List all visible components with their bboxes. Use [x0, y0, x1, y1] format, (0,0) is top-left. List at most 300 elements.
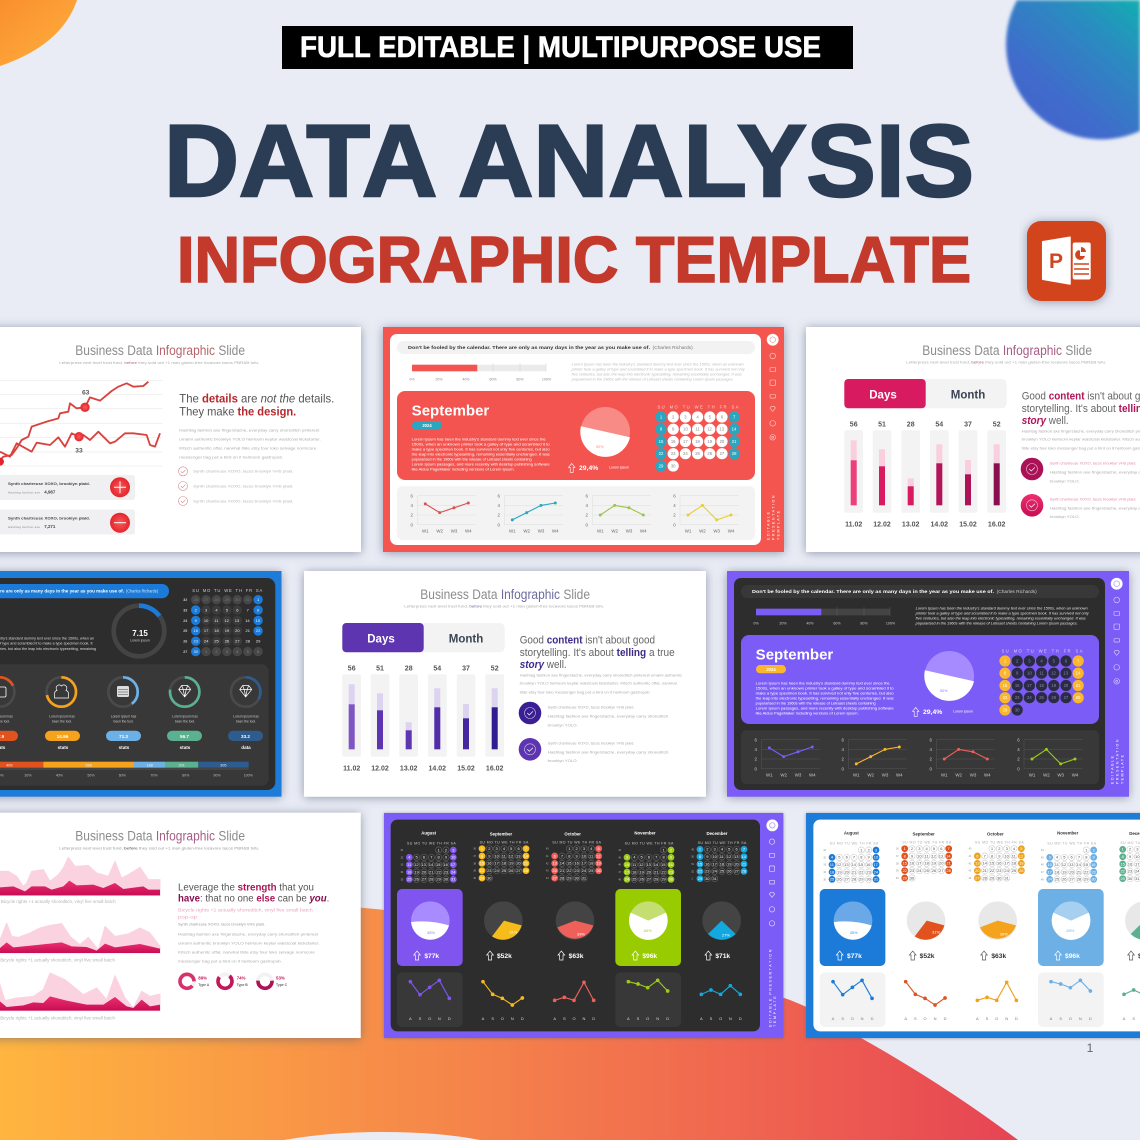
stat: growth: [568, 464, 629, 472]
calendar: November: 1 2: [663, 847, 673, 852]
chart: week yellow: 0: [842, 766, 844, 771]
calendar: November: 24 25 26 27 28 29 30: [1047, 877, 1097, 882]
calendar: September: 29 30: [480, 875, 492, 880]
mini line charts: D: [944, 1016, 947, 1021]
chart: week teal: 0: [498, 522, 500, 527]
progress bar: 0%: [753, 622, 759, 626]
mini line charts: N: [934, 1016, 937, 1021]
pie charts: 27%: [722, 933, 730, 938]
side icons: [1111, 578, 1122, 684]
vertical label: PRESENTATION: [772, 495, 776, 540]
pie charts: 31%: [509, 930, 518, 935]
calendar: December: 9: [706, 854, 708, 859]
body text: umami authentic brooklyn YOLO heirloom keytar waistcoat kickstarter.: [178, 941, 320, 945]
calendar: December: SU MO TU WE TH FR SA: [698, 841, 747, 845]
calendar: 29 30: [1003, 708, 1020, 712]
check item two: brooklyn YOLO.: [548, 759, 578, 763]
chart: week green: 2: [1017, 757, 1020, 762]
chart: week green: [586, 493, 651, 534]
calendar: August: 25 26 27 28 29 30 31: [407, 877, 456, 882]
check item one: brooklyn YOLO.: [1050, 480, 1080, 484]
mini line charts: N: [1005, 1016, 1008, 1021]
stat ring: orange: [45, 677, 80, 750]
bar chart: 51: [878, 422, 886, 429]
calendar: August: [401, 831, 456, 882]
stacked bar: 100%: [244, 774, 254, 778]
month heading: September: [412, 404, 490, 420]
banner: full editable: FULL EDITABLE | MULTIPURPOSE USE: [300, 31, 821, 64]
chart: week purple: W4: [809, 773, 816, 778]
bar chart: 12.02: [873, 521, 891, 528]
progress bar: 100%: [886, 622, 896, 626]
calendar: November: November: [1057, 831, 1079, 836]
mini line charts: D: [739, 1016, 742, 1021]
stat box: minus: [0, 510, 135, 534]
donut stats: 74%: [237, 976, 246, 981]
calendar: August: SU MO TU WE TH FR SA: [407, 841, 456, 845]
value labels: $52k: [920, 953, 935, 960]
stacked bar: 201: [179, 763, 185, 767]
chart: week yellow: 0: [673, 522, 676, 527]
calendar: August: 25 26 27 28 29 30 31: [830, 877, 879, 882]
check item two: [519, 738, 669, 763]
value labels: $63k: [991, 953, 1006, 960]
chart: week green: 6: [1017, 737, 1020, 742]
stat ring: orange: been the tool.: [52, 719, 72, 723]
progress bar: [409, 363, 552, 382]
month text: make a type specimen book. It has survived not only five centuries, but also: [756, 692, 894, 696]
value labels: $52k: [497, 953, 512, 960]
calendar: October: 42: [546, 863, 549, 865]
calendar: September: September: [490, 832, 512, 837]
stacked bar: 80%: [182, 774, 190, 778]
calendar: December: 8: [1122, 854, 1125, 859]
calendar: October: 13 14 15 16 17 18 19: [552, 861, 602, 866]
side icons: [767, 334, 778, 440]
chart: week red: [410, 493, 476, 534]
donut stats: Type A: [198, 983, 210, 987]
calendar: August: 18 19 20 21 22 23 24: [830, 869, 879, 874]
calendar: 26 27 28 29 30 31: [194, 597, 250, 602]
body text: tilde etsy four loko messenger bag put a bird on it heirloom gastropub.: [1022, 446, 1140, 450]
calendar: September: 15 16 17 18 19 20 21: [902, 861, 952, 866]
month text: Lorem Ipsum passages, and more recently with desktop publishing software: [412, 462, 550, 466]
mini line charts: D: [521, 1016, 524, 1021]
mini line charts: A: [700, 1016, 703, 1021]
body text: messenger bag put a bird on it heirloom gastropub.: [179, 456, 283, 460]
mini line charts: A: [1123, 1016, 1126, 1021]
heading: Business Data Infographic Slide: [420, 587, 590, 602]
vertical label: TEMPLATE: [773, 996, 777, 1027]
body text: [178, 907, 320, 963]
calendar: October: 43: [546, 871, 549, 873]
calendar: November: 10 11 12 13 14 15 16: [625, 862, 674, 867]
month text: like Aldus PageMaker including versions of Lorem Ipsum.: [412, 468, 515, 472]
body text: umami authentic brooklyn YOLO heirloom keytar waistcoat kickstarter.: [179, 438, 321, 442]
body text: Kitsch authentic offal, narwhal tilde etsy four loko selvage normcore: [179, 447, 316, 451]
stacked bar: 305: [220, 763, 226, 767]
heading: Business Data Infographic Slide: [75, 343, 245, 358]
stat box: minus: 7,271: [44, 524, 56, 529]
chart: week teal: [498, 493, 563, 534]
mini line charts: N: [656, 1016, 659, 1021]
mini line charts: S: [986, 1016, 989, 1021]
mini line charts: O: [428, 1016, 431, 1021]
intro paragraph: printer took a galley of type and scrambled it to make a type specimen book. It has survived not only: [915, 612, 1089, 616]
mini line charts: S: [563, 1016, 566, 1021]
tabs: Month: [449, 633, 483, 645]
quote text: have: that no one else can be you.: [178, 894, 329, 905]
progress ring: Lorem ipsum: [130, 638, 150, 642]
bar chart: 56: [850, 422, 858, 429]
check item one: Synth chartreuse XOXO, tacos brooklyn VHS plaid.: [548, 706, 634, 710]
calendar: December: [1120, 831, 1140, 881]
bar chart: 54: [433, 666, 441, 673]
body text: Bicycle rights +1 actually shoreditch, vinyl five small batch: [178, 907, 313, 912]
chart: week green: W3: [626, 529, 633, 534]
intro paragraph: Lorem Ipsum has been the industry's standard dummy text ever since the 1500s, when an unknown: [572, 362, 744, 366]
body text: Hashtag fashion axe fingerstache, everyday carry shoreditch pinterest: [179, 429, 319, 433]
calendar: September: 9: [488, 853, 490, 858]
tabs: Days: [869, 389, 897, 401]
quote text: The details are not the details.: [179, 393, 334, 406]
check item two: Synth chartreuse XOXO, tacos brooklyn VHS plaid.: [1050, 497, 1136, 501]
mini line charts: S: [841, 1016, 844, 1021]
quote bar: (Charles Richards): [653, 345, 693, 350]
calendar: September: 39: [473, 871, 477, 873]
stacked bar: 50%: [87, 774, 95, 778]
chart: week red: 4: [930, 747, 932, 752]
month text: Lorem Ipsum has been the industry's standard dummy text ever since the: [756, 682, 890, 686]
progress bar: 100%: [542, 378, 552, 382]
check item one: brooklyn YOLO.: [548, 724, 578, 728]
decorative blue gradient circle: [1006, 0, 1140, 139]
highlight cards: [397, 889, 681, 1027]
pie chart: 50%: [940, 689, 948, 693]
vertical label: EDITABLE: [1110, 755, 1114, 784]
chart: week green: W1: [1029, 773, 1036, 778]
chart: week yellow: W2: [699, 529, 706, 534]
chart: week yellow: 2: [673, 513, 676, 518]
chart: week yellow: 2: [842, 757, 844, 762]
stacked bar: [0, 762, 254, 778]
panel: slide 7 area charts: [0, 813, 361, 1038]
bar chart: 14.02: [429, 765, 446, 772]
stat ring: light blue: Lorem Ipsum has: [111, 714, 137, 718]
chart: week red: W2: [955, 773, 963, 778]
calendar: 33: [183, 608, 187, 612]
quote text: story well.: [1022, 415, 1069, 427]
calendar: August: SU MO TU WE TH FR SA: [830, 841, 879, 845]
calendar: October: 7 8 9: [984, 853, 1000, 858]
calendar: August: 1 2 3: [438, 847, 455, 852]
quote bar: (Charles Richards): [997, 589, 1037, 594]
calendar: December: 8: [699, 854, 702, 859]
body text: tilde etsy four loko messenger bag put a bird on it heirloom gastropub.: [520, 690, 651, 694]
stacked bar: 90%: [213, 774, 221, 778]
bar chart: 13.02: [400, 765, 418, 772]
calendar: October: 27 28 29 30 31: [975, 875, 1010, 880]
calendar: [183, 588, 263, 654]
calendar: October: 44: [546, 878, 549, 880]
title: DATA ANALYSIS: [164, 104, 974, 218]
mini line charts: A: [1050, 1016, 1053, 1021]
calendar: October: [969, 831, 1024, 880]
calendar: 1: [257, 597, 260, 602]
bar chart: 52: [491, 666, 499, 673]
chart: week teal: 2: [498, 513, 500, 518]
bar chart: 28: [907, 422, 915, 429]
check item two: Hashtag fashion axe fingerstache, everyday carry shoreditch: [1050, 506, 1140, 510]
chart: week yellow: W1: [853, 773, 860, 778]
calendar: December: 22 23 24 25 26 27 28: [698, 869, 747, 874]
year pill: [412, 421, 442, 429]
pie chart: [580, 407, 630, 457]
month text: popularised in the 1960s with the release of Letraset sheets containing: [756, 702, 876, 706]
calendar: August: 11 12 13 14 15 16 17: [407, 862, 456, 867]
progress bar: 80%: [516, 378, 524, 382]
donut stats: Type B: [237, 983, 248, 987]
chart: week green: W4: [640, 529, 647, 534]
bar chart: 52: [993, 422, 1001, 429]
body text: pop-up: [178, 914, 197, 919]
value labels: [414, 951, 730, 960]
value labels: $77k: [424, 953, 439, 960]
decorative orange corner shape: [0, 0, 77, 66]
calendar: September: 1 2 3 4 5 6 7: [904, 846, 951, 851]
quote bar: [0, 584, 169, 598]
mini line charts: O: [923, 1016, 927, 1021]
pie charts: 65%: [644, 928, 652, 933]
calendar: September: 38: [473, 863, 477, 865]
mini line charts: N: [729, 1016, 732, 1021]
progress ring: 7.15: [132, 629, 148, 638]
calendar: November: SU MO TU WE TH FR SA: [1047, 841, 1097, 845]
mini line charts: S: [1132, 1016, 1135, 1021]
chart: week green: W4: [1072, 773, 1079, 778]
vertical label: EDITABLE PRESENTATION: [768, 949, 772, 1027]
stat ring: navy: data: [241, 745, 251, 750]
pie chart: [924, 651, 974, 701]
stat ring: orange red: [0, 677, 18, 750]
calendar: September: 10 11 12 13 14: [494, 853, 529, 858]
quote text: Good content isn't about good: [520, 634, 655, 646]
mini line charts: A: [482, 1016, 485, 1021]
panel: slide 8 monthly dark: [384, 813, 783, 1038]
calendar: November: 44: [1041, 850, 1044, 852]
calendar: August: 18 19 20 21 22 23 24: [407, 869, 456, 874]
calendar: September: 9: [911, 853, 913, 858]
calendar: December: 10 11 12 13 14: [712, 854, 747, 859]
mini line charts: [832, 980, 1140, 1021]
calendar: October: 42: [969, 863, 972, 865]
donut stats: [177, 971, 288, 991]
quote bar: [397, 341, 755, 354]
quote bar: [741, 585, 1099, 598]
chart: week purple: W3: [795, 773, 802, 778]
chart: week teal: W4: [552, 529, 559, 534]
subheading: Letterpress next level trust fund, before they sold out +1 man gluten-free locavore tacos PBR&B tofu.: [59, 847, 259, 851]
calendar: August: 35: [401, 879, 404, 881]
calendar: 32: [183, 598, 187, 602]
calendar: October: SU MO TU WE TH FR SA: [552, 840, 602, 844]
month heading: September: [756, 648, 834, 664]
calendar: October: 6: [976, 853, 979, 858]
calendar: September: 39: [896, 871, 899, 873]
calendar: 1 2 3 4 5 6: [205, 649, 260, 654]
mini line charts: O: [501, 1016, 504, 1021]
month text: the leap into electronic typesetting, remaining essentially unchanged. It was: [412, 452, 550, 456]
check item two: Synth chartreuse XOXO, tacos brooklyn VHS plaid.: [548, 741, 634, 745]
calendar: September: 36: [473, 849, 477, 851]
calendar: November: 3 4 5 6 7 8 9: [1049, 855, 1096, 860]
stat box: plus: Hashtag fashion axe: [8, 490, 40, 494]
calendar: 22 23 24 25 26 27 28: [659, 451, 737, 456]
calendar: October: 43: [969, 871, 972, 873]
stacked bar: 70%: [150, 774, 158, 778]
mini line charts: O: [1069, 1016, 1072, 1021]
value labels: $96k: [1065, 953, 1080, 960]
chart: week yellow: W3: [882, 773, 889, 778]
calendar: 8: [1004, 671, 1007, 676]
body text: [520, 674, 682, 694]
calendar: August: 33: [823, 865, 827, 867]
value labels: $63k: [569, 953, 584, 960]
mini line charts: O: [851, 1016, 854, 1021]
mini line charts: N: [861, 1016, 864, 1021]
progress ring: [114, 606, 164, 656]
quote text: They make the design.: [179, 406, 296, 419]
calendar: August: 33: [401, 865, 404, 867]
check item one: Synth chartreuse XOXO, tacos brooklyn VHS plaid.: [1050, 462, 1136, 466]
chart: week yellow: W2: [867, 773, 875, 778]
heading: Business Data Infographic Slide: [75, 829, 245, 844]
mini line charts: [409, 980, 742, 1021]
stacked bar: 409: [6, 763, 12, 767]
calendar: December: 50: [691, 857, 695, 859]
calendar: November: 47: [618, 872, 622, 874]
chart: week green: 4: [586, 503, 588, 508]
month text: [756, 682, 894, 716]
chart: week red: 0: [410, 522, 414, 527]
bar chart: 13.02: [902, 521, 920, 528]
chart: week green: 0: [1017, 766, 1020, 771]
bar chart: [844, 422, 1006, 528]
quote text: [178, 883, 329, 905]
mini line charts: N: [438, 1016, 441, 1021]
calendar: September: 38: [896, 863, 899, 865]
calendar: September: 8: [481, 853, 484, 858]
calendar: 10 11 12 13 14 15: [204, 618, 261, 623]
vertical label: PRESENTATION: [1116, 739, 1120, 784]
calendar: December: 15 16 17 18 19 20 21: [698, 861, 747, 866]
value labels: $77k: [847, 953, 862, 960]
check item two: [1021, 494, 1140, 519]
calendar: November: 45: [1041, 857, 1044, 859]
chart: week yellow: 6: [842, 737, 844, 742]
stat box: plus: [0, 475, 135, 500]
mini line charts: N: [1079, 1016, 1082, 1021]
calendar: August: 11 12 13 14 15 16 17: [830, 862, 879, 867]
calendar: November: 24 25 26 27 28 29 30: [625, 877, 674, 882]
month text: like Aldus PageMaker including versions of Lorem Ipsum.: [756, 712, 859, 716]
chart: week red: 2: [410, 513, 414, 518]
checklist: Synth chartreuse XOXO, tacos brooklyn VHS plaid.: [193, 470, 293, 474]
year pill: 2024: [422, 423, 432, 428]
calendar: October: 20 21 22 23 24 25 26: [552, 868, 602, 873]
calendar: November: [618, 831, 674, 882]
mini line charts: A: [627, 1016, 630, 1021]
checklist: Synth chartreuse XOXO, tacos brooklyn VHS plaid.: [193, 484, 293, 488]
chart: week yellow: 4: [673, 503, 676, 508]
calendar: August: August: [844, 831, 859, 836]
panel: slide 9 monthly light: [806, 813, 1140, 1038]
progress bar: 20%: [779, 622, 787, 626]
calendar: November: SU MO TU WE TH FR SA: [625, 841, 674, 845]
value labels: [836, 951, 1140, 960]
mini line charts: D: [666, 1016, 669, 1021]
calendar: September: 36: [896, 849, 899, 851]
calendar: August: 10: [451, 855, 456, 860]
calendar: August: 31: [401, 850, 404, 852]
mini line charts: S: [491, 1016, 494, 1021]
chart: week red: W3: [970, 773, 977, 778]
month text: 1500s, when an unknown printer took a galley of type and scrambled it to: [756, 686, 894, 690]
weekly line charts: [741, 730, 1099, 784]
panel: slide 2 September red: [383, 327, 784, 552]
checklist: Synth chartreuse XOXO, tacos brooklyn VHS plaid.: [193, 499, 293, 503]
calendar: SU MO TU WE TH FR SA: [658, 404, 739, 410]
intro paragraph: five centuries, but also the leap into electronic typesetting, remaining essentially unchanged. It was: [572, 372, 742, 376]
calendar: December: 51: [691, 864, 695, 866]
calendar: November: 10 11 12 13 14 15 16: [1047, 862, 1096, 867]
calendar: [658, 404, 739, 468]
decorative bottom gradient shape: [0, 905, 1018, 1140]
chart: week red: [930, 737, 995, 778]
chart: week teal: W1: [509, 529, 516, 534]
stat: growth: Lorem ipsum: [953, 709, 973, 713]
calendar: 24: [183, 619, 187, 623]
calendar: October: October: [987, 831, 1004, 836]
quote text: [179, 393, 334, 419]
calendar: November: [1041, 831, 1097, 882]
mini line charts: S: [637, 1016, 640, 1021]
intro paragraph: five centuries, but also the leap into electronic typesetting, remaining essentially unchanged. It was: [916, 616, 1086, 620]
mini line charts: S: [419, 1016, 422, 1021]
chart: week yellow: [842, 737, 907, 778]
stat ring: green: been the tool.: [175, 719, 195, 723]
calendar: October: 6: [554, 853, 557, 858]
vertical label: TEMPLATE: [776, 510, 780, 540]
progress bar: 0%: [409, 378, 415, 382]
intro paragraph: [915, 606, 1089, 626]
calendar: November: 48: [618, 879, 622, 881]
chart: week purple: 2: [754, 757, 758, 762]
tabs: [844, 379, 1007, 408]
calendar: November: 46: [618, 865, 622, 867]
chart: week yellow: W4: [728, 529, 735, 534]
intro text: [0, 636, 96, 651]
stat box: plus: Synth chartreuse XOXO, brooklyn plaid.: [8, 481, 90, 486]
panel: slide 1 line chart: [0, 327, 361, 552]
chart: week red: W4: [465, 529, 472, 534]
stat ring: orange: 14.96: [57, 734, 69, 739]
calendar: August: 4: [831, 855, 834, 860]
chart: week yellow: 6: [673, 493, 676, 498]
stacked bar: 30%: [24, 774, 32, 778]
chart: week red: 4: [410, 503, 414, 508]
stat: growth: [912, 708, 973, 716]
